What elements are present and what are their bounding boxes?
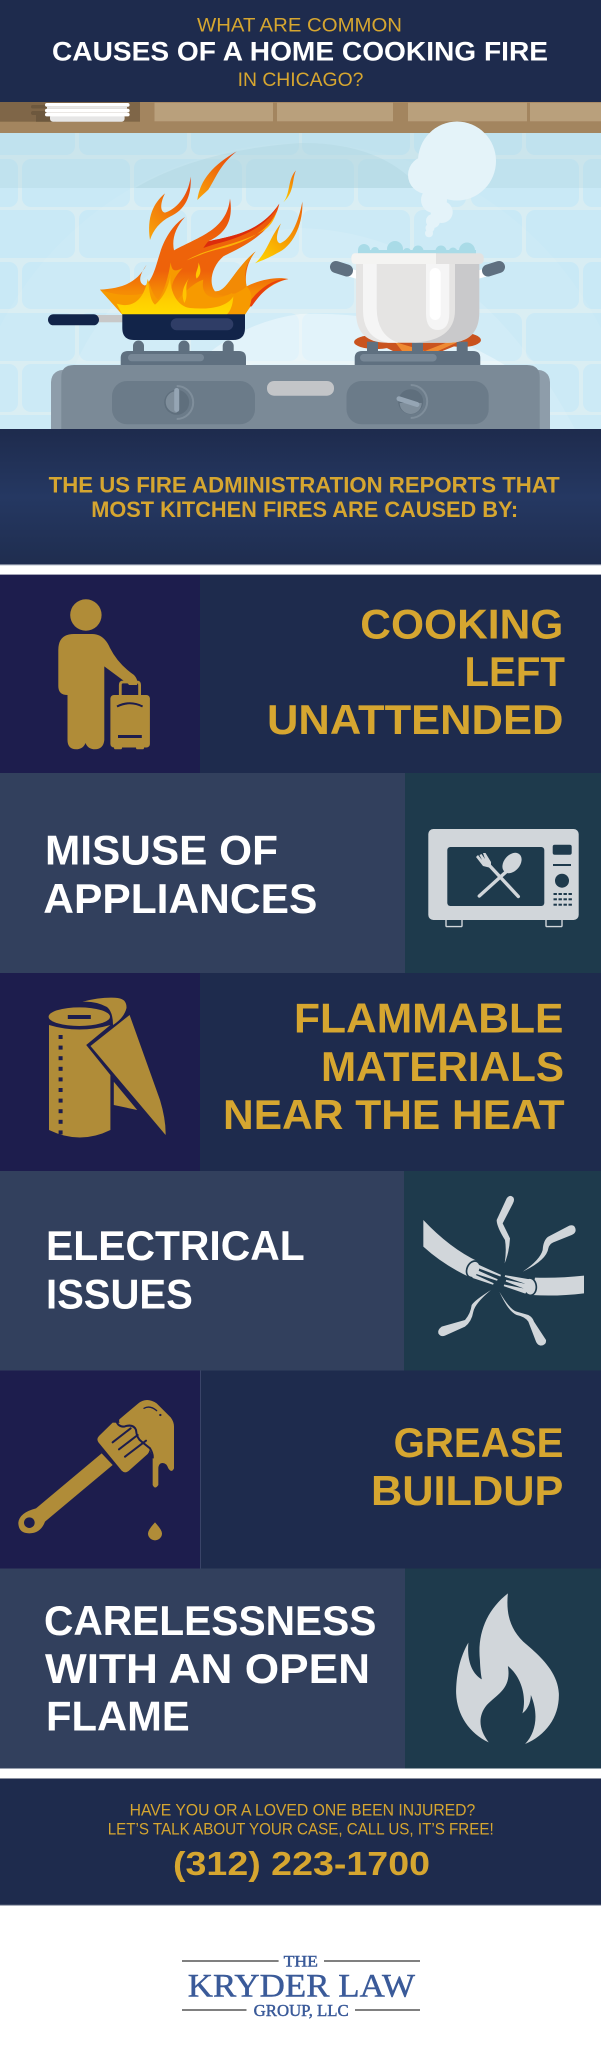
title line 1: WHAT ARE COMMON: [197, 15, 402, 37]
icon: microwave: [428, 829, 579, 927]
call to action text line 2: LET’S TALK ABOUT YOUR CASE, CALL US, IT’S FREE!: [108, 1820, 494, 1839]
heading: cooking left unattended: [267, 601, 565, 743]
icon: paper towel roll: [49, 998, 166, 1138]
burner fire under pot: [354, 333, 481, 352]
intro band: [0, 429, 601, 565]
phone number: (312) 223-1700: [173, 1846, 430, 1883]
logo: Kryder Law Group: KRYDER LAW: [188, 1969, 416, 2005]
heading: cooking left unattended: COOKING: [360, 601, 563, 648]
heading: cooking left unattended: UNATTENDED: [267, 696, 563, 743]
title line 2: CAUSES OF A HOME COOKING FIRE: [52, 37, 548, 67]
panel: misuse of appliances: [0, 773, 601, 973]
stove: [51, 365, 550, 429]
frying pan: [48, 314, 245, 340]
heading: electrical issues: ISSUES: [46, 1270, 193, 1317]
heading: carelessness with an open flame: FLAME: [46, 1693, 190, 1740]
heading: misuse of appliances: [43, 827, 317, 922]
left knob: [164, 386, 193, 419]
tiled wall: [0, 133, 601, 429]
heading: carelessness with an open flame: WITH AN OPEN: [45, 1645, 370, 1692]
heading: electrical issues: ELECTRICAL: [46, 1222, 305, 1269]
heading: flammable materials near the heat: [223, 995, 565, 1138]
flames: [100, 151, 302, 315]
panel: carelessness with an open flame: [0, 1568, 601, 1768]
heading: grease buildup: GREASE: [394, 1419, 563, 1466]
title panel: [0, 0, 601, 102]
icon: flame: [456, 1593, 559, 1744]
heading: flammable materials near the heat: MATERIALS: [321, 1043, 564, 1090]
panel: electrical issues: [0, 1171, 601, 1370]
cooking pot: [336, 241, 499, 343]
logo: Kryder Law Group: THE: [284, 1954, 318, 1971]
logo: Kryder Law Group: [182, 1954, 420, 2020]
heading: misuse of appliances: MISUSE OF: [45, 827, 278, 874]
heading: electrical issues: [46, 1222, 305, 1317]
illustration: kitchen scene: [0, 102, 601, 429]
heading: carelessness with an open flame: [44, 1597, 376, 1740]
panel: cooking left unattended: [0, 575, 601, 773]
heading: flammable materials near the heat: NEAR THE HEAT: [223, 1091, 565, 1138]
right knob: [398, 385, 427, 418]
heading: carelessness with an open flame: CARELESSNESS: [44, 1597, 376, 1644]
intro line 1: THE US FIRE ADMINISTRATION REPORTS THAT: [49, 472, 560, 498]
shelf: [0, 102, 601, 133]
right burner: [355, 342, 480, 366]
icon: greasy brush: [18, 1400, 174, 1540]
icon: person with suitcase: [58, 599, 150, 749]
intro line 2: MOST KITCHEN FIRES ARE CAUSED BY:: [91, 497, 518, 522]
plates on shelf: [45, 103, 130, 122]
logo: Kryder Law Group: GROUP, LLC: [254, 2001, 349, 2020]
heading: grease buildup: [371, 1419, 563, 1514]
heading: flammable materials near the heat: FLAMMABLE: [294, 995, 563, 1042]
title line 3: IN CHICAGO?: [238, 69, 364, 91]
call to action text: HAVE YOU OR A LOVED ONE BEEN INJURED?: [130, 1801, 475, 1820]
heading: cooking left unattended: LEFT: [464, 648, 565, 695]
panel: flammable materials: [0, 973, 601, 1171]
icon: broken wire with sparks: [423, 1196, 584, 1346]
steam cloud: [408, 122, 496, 237]
left burner: [121, 340, 246, 366]
panel: grease buildup: [0, 1370, 601, 1568]
call to action panel: [0, 1778, 601, 1906]
heading: grease buildup: BUILDUP: [371, 1467, 563, 1514]
heading: misuse of appliances: APPLIANCES: [43, 875, 317, 922]
